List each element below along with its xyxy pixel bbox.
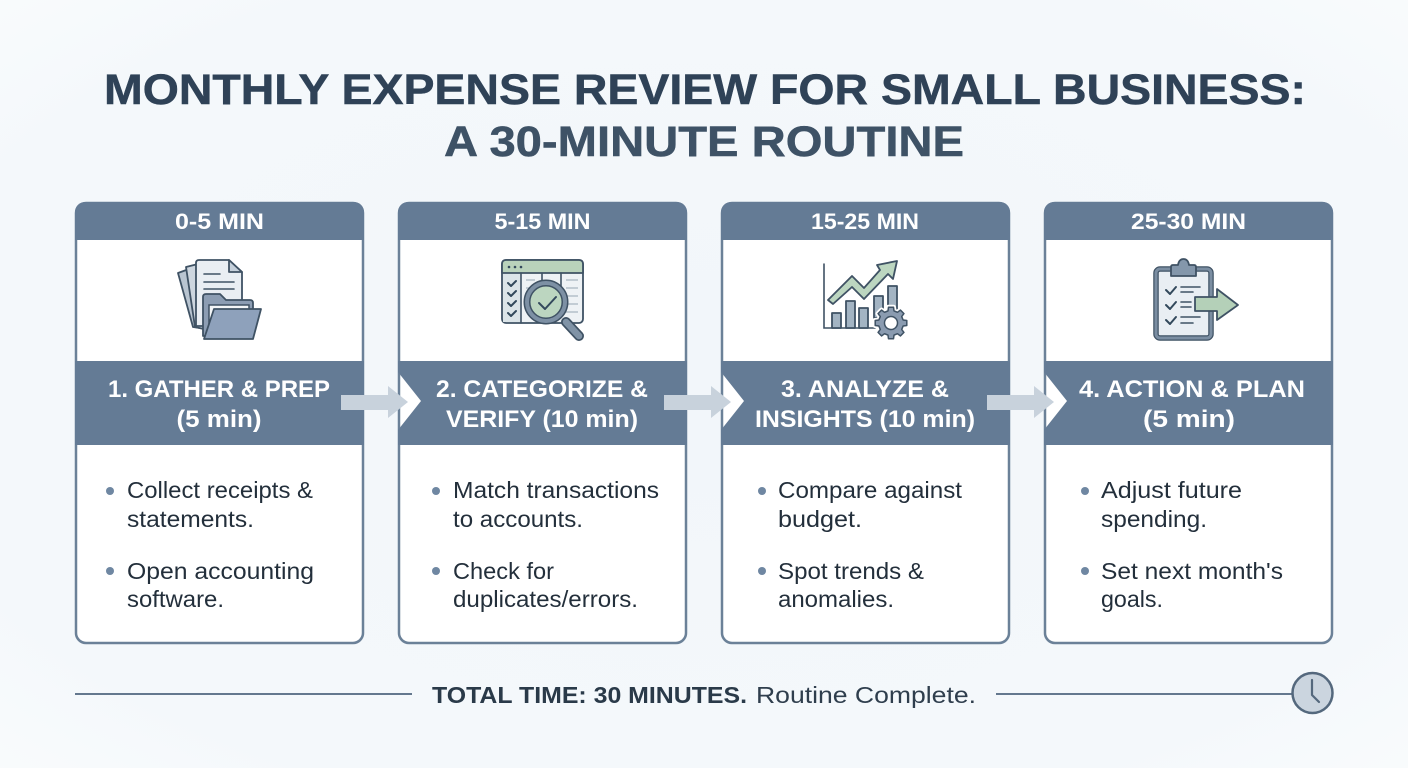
- bullet list: duplicates/errors.: [453, 586, 638, 612]
- bullet list: spending.: [1101, 506, 1207, 532]
- step heading: 2. CATEGORIZE &: [436, 376, 648, 403]
- panel: step 2 categorize and verify: [398, 202, 687, 643]
- step heading: VERIFY (10 min): [446, 406, 638, 433]
- panel: step 3 analyze and insights: [721, 202, 1010, 643]
- icon: clock: [1292, 673, 1332, 713]
- step heading: (5 min): [1143, 406, 1235, 433]
- time header: 0-5 min: 0-5 MIN: [175, 209, 264, 234]
- bullet list: [1081, 477, 1283, 612]
- bullet list: [106, 477, 314, 612]
- bullet list: Adjust future: [1101, 477, 1242, 503]
- bullet list: to accounts.: [453, 506, 583, 532]
- bullet list: [758, 477, 963, 612]
- title: [104, 66, 1306, 166]
- time header: 15-25 min: [721, 202, 1010, 240]
- time header: 25-30 min: [1044, 202, 1333, 240]
- total time text: Routine Complete.: [756, 682, 976, 708]
- bullet list: budget.: [778, 506, 862, 532]
- time header: 25-30 min: 25-30 MIN: [1131, 209, 1246, 234]
- bullet list: Match transactions: [453, 477, 659, 503]
- time header: 15-25 min: 15-25 MIN: [811, 209, 919, 234]
- panel: step 1 gather and prep: [75, 202, 364, 643]
- bullet list: goals.: [1101, 586, 1163, 612]
- bullet list: Open accounting: [127, 558, 314, 584]
- arrow: step 1 to step 2: [341, 386, 408, 418]
- icon: clipboard with arrow: [1156, 259, 1238, 338]
- icon: chart with arrow and gear: [824, 261, 907, 339]
- bullet list: Set next month's: [1101, 558, 1283, 584]
- bullet list: statements.: [127, 506, 254, 532]
- bullet list: Spot trends &: [778, 558, 924, 584]
- step heading: 1. GATHER & PREP: [108, 376, 330, 403]
- icon: documents and folder: [178, 260, 261, 339]
- bullet list: [432, 477, 659, 612]
- bullet list: software.: [127, 586, 224, 612]
- title: MONTHLY EXPENSE REVIEW FOR SMALL BUSINESS:: [104, 66, 1306, 114]
- title: A 30-MINUTE ROUTINE: [444, 118, 964, 166]
- step heading: [398, 361, 687, 445]
- step heading: [75, 361, 364, 445]
- step heading: 4. ACTION & PLAN: [1079, 376, 1305, 403]
- arrow: step 3 to step 4: [987, 386, 1054, 418]
- icon: spreadsheet with magnifier: [502, 260, 583, 336]
- step heading: INSIGHTS (10 min): [755, 406, 975, 433]
- step heading: 3. ANALYZE &: [781, 376, 949, 403]
- total time text: TOTAL TIME: 30 MINUTES.: [432, 682, 747, 708]
- bullet list: Compare against: [778, 477, 963, 503]
- time header: 5-15 min: [398, 202, 687, 240]
- time header: 0-5 min: [75, 202, 364, 240]
- step heading: [721, 361, 1010, 445]
- bullet list: Collect receipts &: [127, 477, 313, 503]
- step heading: (5 min): [176, 406, 262, 433]
- bullet list: Check for: [453, 558, 554, 584]
- footer timeline: [75, 673, 1332, 713]
- step heading: [1044, 361, 1333, 445]
- total time text: [432, 682, 976, 708]
- arrow: step 2 to step 3: [664, 386, 731, 418]
- panel: step 4 action and plan: [1044, 202, 1333, 643]
- bullet list: anomalies.: [778, 586, 894, 612]
- time header: 5-15 min: 5-15 MIN: [494, 209, 590, 234]
